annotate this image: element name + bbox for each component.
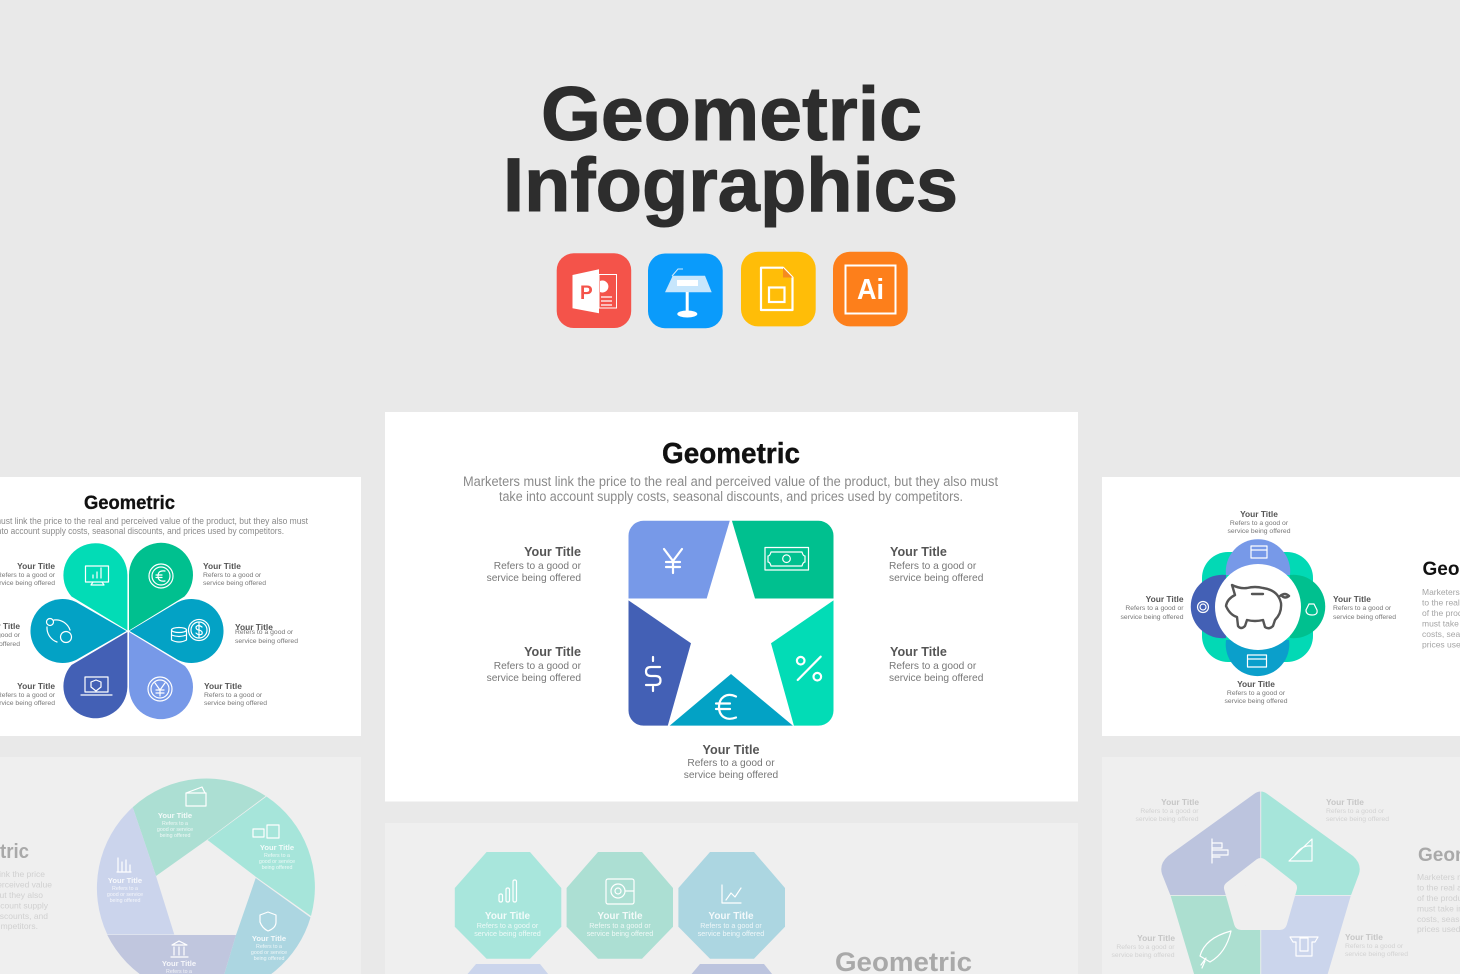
icon: euro — [716, 695, 736, 719]
main title — [503, 72, 958, 228]
star labels: service being offered — [889, 573, 984, 584]
star slide heading: Geometric — [662, 438, 800, 470]
ring labels: being offered — [110, 898, 140, 904]
star labels: service being offered — [487, 673, 581, 684]
ring labels: Your Title — [108, 876, 142, 885]
ring description: count supply — [0, 900, 49, 910]
flower heading: Geometric — [84, 493, 175, 514]
piggy labels: Refers to a good or — [1230, 520, 1289, 527]
flower labels: Your Title — [17, 561, 55, 571]
icon: Google Slides — [741, 252, 816, 326]
star labels: service being offered — [684, 770, 779, 781]
star diagram segments — [628, 520, 834, 726]
octagon labels — [474, 911, 764, 938]
star labels: Your Title — [524, 645, 581, 659]
star labels: Refers to a good or — [889, 661, 977, 672]
icon: Illustrator — [833, 252, 908, 326]
ring labels: Refers to a — [256, 944, 282, 950]
pentagon icons — [1200, 839, 1318, 968]
flower icons — [46, 564, 210, 701]
ring labels: Refers to a — [162, 821, 188, 827]
piggy labels: Your Title — [1333, 594, 1371, 604]
panel: piggy slide — [1102, 477, 1460, 736]
pentagon quadrants — [1161, 792, 1360, 974]
icon: banknote — [765, 548, 808, 570]
ring labels: good or service — [251, 950, 287, 956]
piggy petals — [1191, 539, 1325, 676]
ring description: scounts, and — [0, 911, 48, 921]
piggy labels: Your Title — [1146, 594, 1184, 604]
pentagon labels: Your Title — [1326, 797, 1364, 807]
ring labels — [107, 811, 295, 974]
flower labels: Your Title — [204, 681, 242, 691]
flower labels: Your Title — [203, 561, 241, 571]
piggy labels: service being offered — [1121, 614, 1184, 621]
ring labels: Your Title — [158, 811, 192, 820]
ring labels: being offered — [262, 865, 292, 871]
flower labels: Your Title — [17, 681, 55, 691]
piggy labels: Refers to a good or — [1333, 605, 1392, 612]
flower labels: Refers to a good or — [235, 629, 294, 636]
star labels: Refers to a good or — [889, 561, 977, 572]
icon: piggy bank — [1226, 585, 1289, 628]
icon: dollar — [646, 657, 660, 691]
octagon labels: Refers to a good or — [589, 921, 651, 930]
ring description: ink the price — [0, 869, 45, 879]
flower labels: Refers to a good or — [204, 692, 263, 699]
star slide description — [463, 474, 998, 504]
piggy labels: service being offered — [1333, 614, 1396, 621]
octagon labels: Your Title — [597, 911, 643, 922]
pentagon labels: Your Title — [1161, 797, 1199, 807]
panel: flower slide — [0, 477, 361, 736]
ring labels: Refers to a — [112, 886, 138, 892]
star labels: Your Title — [703, 743, 759, 757]
piggy labels: service being offered — [1225, 698, 1288, 705]
star labels: Your Title — [890, 545, 947, 559]
main title: Infographics — [503, 143, 958, 228]
octagon labels: Refers to a good or — [477, 921, 539, 930]
star labels — [487, 545, 984, 781]
flower petals — [30, 543, 224, 719]
flower labels: service being offered — [204, 700, 267, 707]
panel: star slide (main) — [385, 412, 1078, 802]
pentagon centre cut-out — [1231, 865, 1290, 923]
ring labels: good or service — [157, 827, 193, 833]
octagon labels: Refers to a good or — [700, 921, 762, 930]
star labels: service being offered — [487, 573, 581, 584]
pentagon labels: Refers to a good or — [1326, 808, 1385, 815]
octagon labels: Your Title — [485, 911, 531, 922]
star slide description: take into account supply costs, seasonal discounts, and prices used by competitors. — [499, 489, 963, 504]
pentagon labels — [1112, 797, 1408, 959]
star slide description: Marketers must link the price to the real and perceived value of the product, but they also must — [463, 474, 998, 489]
octagons — [454, 852, 785, 974]
piggy small icons — [1198, 546, 1317, 667]
flower labels — [0, 561, 298, 707]
star labels: Refers to a good or — [494, 561, 582, 572]
ring segments — [97, 779, 315, 974]
ring labels: Your Title — [162, 959, 196, 968]
octagon labels: Your Title — [708, 911, 754, 922]
panel: rounded pentagon slide (faded) — [1112, 792, 1460, 974]
ring labels: being offered — [254, 956, 284, 962]
piggy labels: Your Title — [1240, 509, 1278, 519]
panel: pentagon ring slide (faded) — [0, 757, 361, 974]
star labels: Your Title — [890, 645, 947, 659]
piggy labels: Your Title — [1237, 679, 1275, 689]
ring description — [0, 869, 52, 931]
piggy teal backing — [1202, 552, 1313, 662]
star labels: Your Title — [524, 545, 581, 559]
pentagon labels: service being offered — [1326, 816, 1389, 823]
icon: PowerPoint: P — [580, 283, 593, 304]
star labels: service being offered — [889, 673, 984, 684]
pentagon labels: service being offered — [1136, 816, 1199, 823]
ring labels: Your Title — [260, 843, 294, 852]
pentagon labels: Refers to a good or — [1345, 943, 1404, 950]
flower description — [0, 516, 308, 536]
pentagon labels: service being offered — [1112, 952, 1175, 959]
octagon labels: service being offered — [587, 929, 653, 938]
flower labels: Refers to a good or — [203, 572, 262, 579]
piggy description — [1422, 587, 1460, 650]
piggy labels: service being offered — [1228, 528, 1291, 535]
ring labels: Refers to a — [264, 853, 290, 859]
ring labels: good or service — [259, 859, 295, 865]
icon: percent — [797, 657, 821, 680]
pentagon labels: Refers to a good or — [1116, 944, 1175, 951]
icon: Keynote — [648, 254, 723, 328]
piggy labels: Refers to a good or — [1125, 605, 1184, 612]
pentagon description — [1417, 872, 1460, 934]
panel: octagon slide (faded) — [454, 852, 972, 974]
ring description: mpetitors. — [1, 921, 38, 931]
octagon labels: service being offered — [698, 929, 764, 938]
star labels: Refers to a good or — [687, 758, 775, 769]
icon: Illustrator: Ai — [857, 274, 884, 306]
pentagon labels: service being offered — [1345, 951, 1408, 958]
icon: PowerPoint — [557, 253, 631, 328]
pentagon labels: Your Title — [1345, 932, 1383, 942]
ring labels: good or service — [107, 892, 143, 898]
star labels: Refers to a good or — [494, 661, 582, 672]
flower labels: service being offered — [203, 580, 266, 587]
flower labels: Your Title — [235, 622, 273, 632]
piggy labels — [1121, 509, 1396, 705]
ring heading: tric — [0, 841, 29, 863]
ring labels: being offered — [160, 833, 190, 839]
ring description: ut they also — [0, 890, 43, 900]
flower labels: service being offered — [235, 638, 298, 645]
piggy labels: Refers to a good or — [1227, 690, 1286, 697]
octagon labels: service being offered — [474, 929, 541, 938]
pentagon labels: Refers to a good or — [1140, 808, 1199, 815]
main title: Geometric — [541, 72, 922, 157]
ring labels: Your Title — [252, 934, 286, 943]
ring icons — [117, 787, 279, 957]
icon: yen — [664, 549, 682, 573]
octagon icons — [499, 879, 741, 904]
pentagon labels: Your Title — [1137, 933, 1175, 943]
